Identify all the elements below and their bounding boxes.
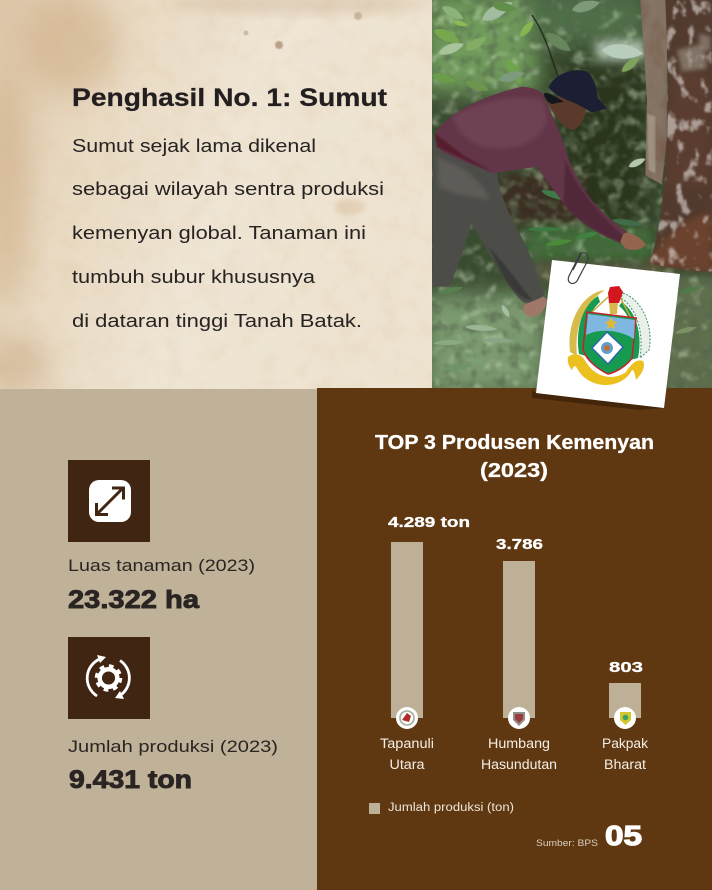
face and neck xyxy=(547,96,586,130)
text block: intro paragraph: tumbuh subur khususnya xyxy=(72,266,316,287)
stat: production volume xyxy=(68,737,278,794)
bar: Humbang Hasundutan: Humbang xyxy=(488,736,550,751)
stat: production volume: Jumlah produksi (2023) xyxy=(68,737,278,756)
text block: intro paragraph: Sumut sejak lama dikenal xyxy=(72,135,316,156)
photo: man tending plants in the forest xyxy=(425,0,712,393)
chart title: (2023) xyxy=(480,460,548,482)
tree trunk behind xyxy=(640,0,667,185)
photo card with Sumatera Utara emblem xyxy=(532,252,680,410)
white card xyxy=(536,260,680,408)
shield xyxy=(583,312,636,374)
bar: Pakpak Bharat: Bharat xyxy=(604,757,646,772)
trousers xyxy=(433,137,545,303)
heading: Penghasil No. 1: Sumut: Penghasil No. 1: Sumut xyxy=(72,84,388,112)
central white emblem xyxy=(592,332,623,364)
shirt xyxy=(435,87,627,243)
foot xyxy=(523,297,547,317)
upper-left bright leaves xyxy=(431,0,647,170)
panel: paper background xyxy=(0,0,432,395)
torch and fist xyxy=(609,302,618,314)
text block: intro paragraph: di dataran tinggi Tanah Batak. xyxy=(72,310,362,331)
rice stalk xyxy=(569,290,605,356)
bar: Tapanuli Utara: Utara xyxy=(390,757,425,772)
chart title: TOP 3 Produsen Kemenyan xyxy=(375,432,654,454)
thin dark branch xyxy=(532,15,558,77)
gold chains xyxy=(592,297,631,318)
star xyxy=(605,317,617,329)
cotton branch xyxy=(621,293,650,358)
legend: Jumlah produksi (ton) xyxy=(388,802,514,814)
paperclip xyxy=(568,252,588,283)
main tree trunk xyxy=(645,0,712,272)
text block: intro paragraph: sebagai wilayah sentra produksi xyxy=(72,178,384,199)
icon tile: area expand xyxy=(68,460,150,542)
bar: Tapanuli Utara xyxy=(380,514,470,772)
bar: Humbang Hasundutan: 3.786 xyxy=(496,536,543,553)
man figure xyxy=(433,70,646,317)
text block: intro paragraph: kemenyan global. Tanaman ini xyxy=(72,222,366,243)
bar chart: top 3 producers xyxy=(380,514,648,772)
panel: brown chart background xyxy=(317,388,712,890)
hand xyxy=(620,233,646,250)
bar: Pakpak Bharat: 803 xyxy=(609,659,643,676)
stat: land area xyxy=(68,556,255,614)
ground foliage xyxy=(433,188,702,372)
bar: Tapanuli Utara: Tapanuli xyxy=(380,736,434,751)
forest background xyxy=(425,0,712,393)
yellow ribbon xyxy=(568,354,644,385)
sky xyxy=(586,314,635,339)
chart title xyxy=(375,432,654,482)
page number: 05 xyxy=(605,820,642,851)
emblem xyxy=(568,286,650,385)
bar: Humbang Hasundutan xyxy=(481,536,557,772)
bar: Humbang Hasundutan: Hasundutan xyxy=(481,757,557,772)
card shadow xyxy=(532,390,664,410)
stat: land area: Luas tanaman (2023) xyxy=(68,556,255,575)
icon tile: production gear xyxy=(68,637,150,719)
cap xyxy=(549,70,607,113)
stat: land area: 23.322 ha xyxy=(68,586,200,614)
green leaves xyxy=(578,296,640,360)
bar: Pakpak Bharat: Pakpak xyxy=(602,736,648,751)
text block: intro paragraph xyxy=(72,135,384,331)
stat: production volume: 9.431 ton xyxy=(69,766,192,794)
panel: beige stats background xyxy=(0,389,317,890)
bar: Pakpak Bharat xyxy=(602,659,648,772)
source note: Sumber: BPS xyxy=(536,838,598,849)
bar: Tapanuli Utara: 4.289 ton xyxy=(388,514,470,531)
